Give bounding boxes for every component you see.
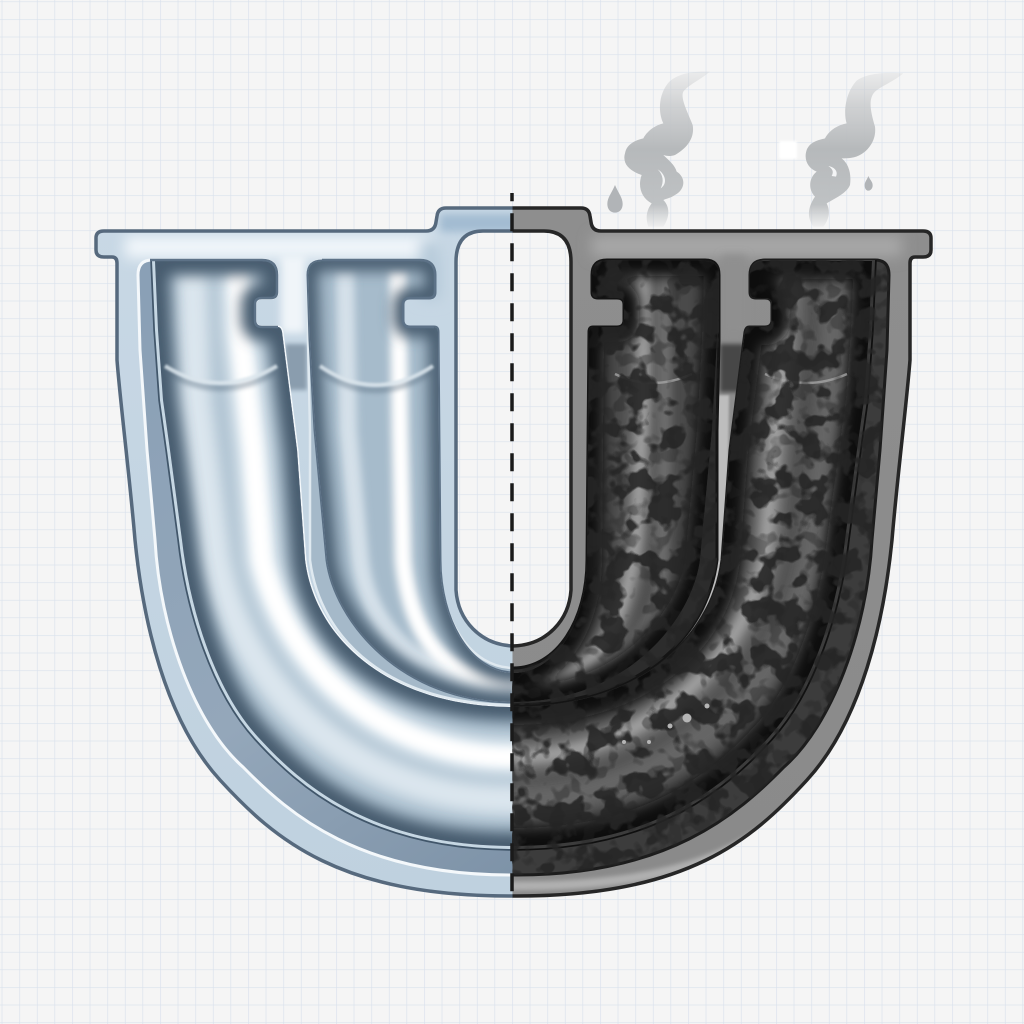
sooted inner runner joint seam xyxy=(615,374,692,383)
clean metal casting body xyxy=(96,208,540,896)
smoke plumes rising from the sooted side xyxy=(607,72,903,227)
panel: sooted half of the manifold xyxy=(467,208,931,896)
soot layer: large patches xyxy=(512,260,888,874)
clean outer heat-shield band xyxy=(138,260,540,875)
gap shadow over clean casting xyxy=(285,344,307,390)
panel: clean half of the manifold xyxy=(96,208,560,896)
sooted outer runner joint seam xyxy=(765,374,847,383)
clean outer runner joint seam xyxy=(165,366,277,388)
clean outer runner tube xyxy=(150,261,512,851)
soot deposits inside sooted runners xyxy=(512,260,888,874)
sooted inner runner tube xyxy=(512,261,718,702)
sooted outer band xyxy=(487,260,889,875)
dashed centre divider line xyxy=(510,193,514,897)
icon: right oil drop xyxy=(865,176,873,191)
clean cavity top edges xyxy=(150,260,435,327)
white spark square xyxy=(779,141,797,159)
sooted inner runner cavity rim xyxy=(514,258,720,706)
icon: left smoke plume xyxy=(624,72,710,227)
icon: left oil drop xyxy=(607,185,623,213)
clean inner runner joint seam xyxy=(320,366,433,390)
icon: right smoke highlight crescent xyxy=(828,166,837,177)
soot bare metal specks xyxy=(622,704,710,744)
icon: right smoke plume xyxy=(806,73,903,227)
icon: left smoke highlight crescent xyxy=(658,169,665,188)
clean inner runner cavity rim xyxy=(306,260,510,706)
sooted outer runner tube xyxy=(512,260,877,851)
clean inner runner tube xyxy=(306,260,512,704)
soot layer: small flecks xyxy=(512,260,886,870)
gap shadow on sooted casting xyxy=(720,344,744,392)
sooted metal casting body xyxy=(487,208,931,896)
